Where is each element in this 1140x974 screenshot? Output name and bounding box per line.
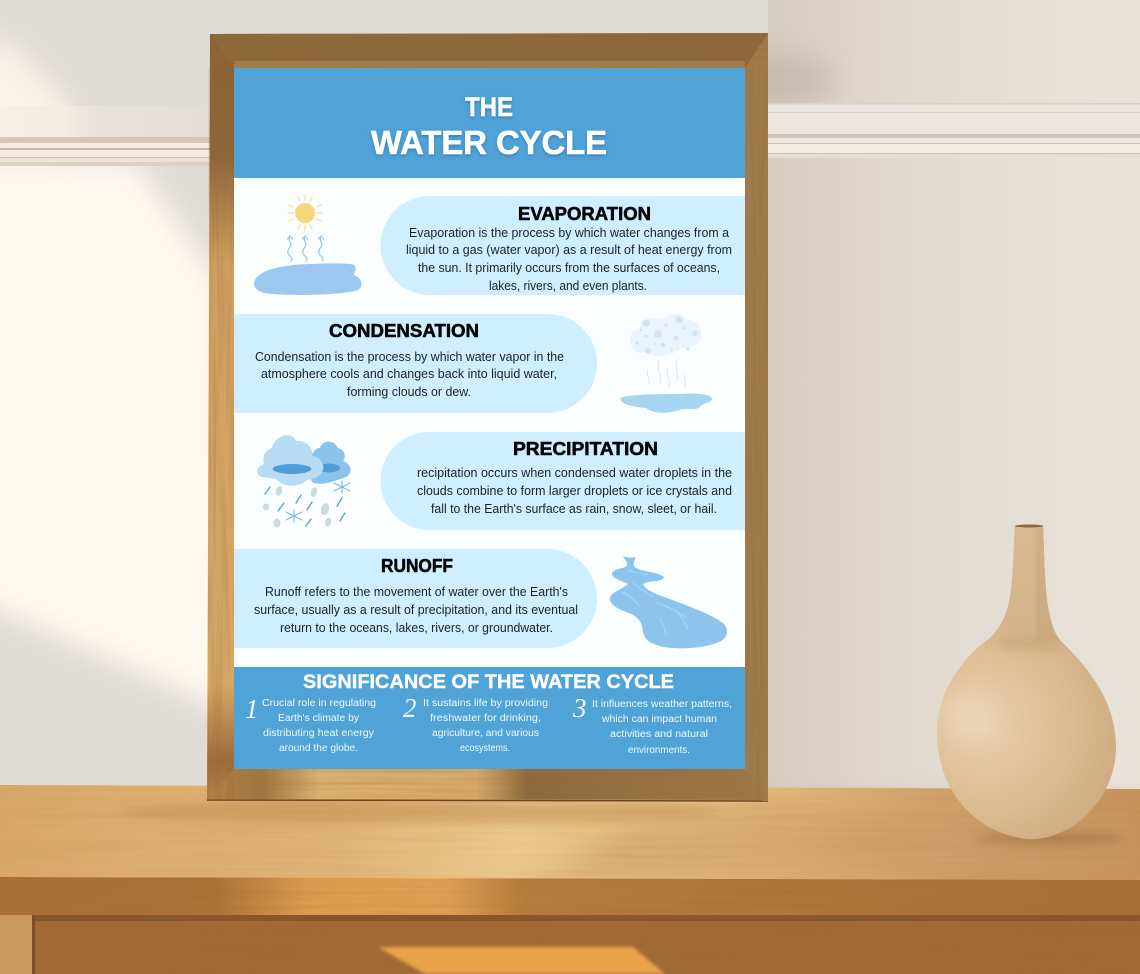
- vase: [937, 524, 1125, 843]
- front cloud: [257, 435, 323, 486]
- table top: [0, 785, 1140, 880]
- snowflakes: [286, 481, 350, 522]
- panel: condensation: atmosphere cools and changes back into liquid water,: [261, 367, 557, 381]
- point 1: [245, 694, 376, 754]
- title: [371, 92, 607, 162]
- point 3: environments.: [628, 745, 690, 756]
- puddle: [254, 263, 361, 295]
- back cloud: [309, 442, 351, 484]
- point 2: [403, 693, 548, 754]
- panel: evaporation: the sun. It primarily occurs from the surfaces of oceans,: [418, 261, 720, 275]
- point 1: Crucial role in regulating: [262, 698, 376, 709]
- wall molding: [0, 103, 1140, 166]
- point 2: 2: [403, 693, 416, 723]
- steam: [647, 360, 686, 388]
- panel: runoff: return to the oceans, lakes, rivers, or groundwater.: [280, 621, 553, 635]
- cloud: [630, 314, 701, 356]
- icon: river: [610, 556, 727, 648]
- wooden table: [0, 785, 1140, 974]
- point 3: [572, 693, 732, 756]
- panel: precipitation: recipitation occurs when condensed water droplets in the: [417, 466, 732, 480]
- picture frame: [207, 33, 768, 801]
- panel: runoff: RUNOFF: [381, 556, 453, 576]
- sunlight patch on the left wall: [0, 36, 209, 712]
- title: WATER CYCLE: [371, 125, 607, 162]
- point 2: It sustains life by providing: [423, 698, 548, 709]
- hail: [263, 485, 332, 528]
- poster background: [234, 68, 745, 769]
- sun: [288, 196, 322, 231]
- point 2: freshwater for drinking,: [430, 713, 541, 724]
- panel: condensation: Condensation is the process by which water vapor in the: [255, 350, 564, 364]
- table leg: [0, 915, 34, 974]
- header band: [234, 68, 745, 178]
- point 3: activities and natural: [610, 729, 708, 740]
- background: wall: [0, 0, 890, 788]
- poster: [234, 68, 745, 769]
- panel: runoff: Runoff refers to the movement of water over the Earth's: [265, 585, 568, 599]
- table front edge: [0, 877, 1140, 918]
- panel: evaporation: Evaporation is the process by which water changes from a: [409, 226, 729, 240]
- significance heading: SIGNIFICANCE OF THE WATER CYCLE: [303, 671, 674, 693]
- point 1: distributing heat energy: [263, 728, 374, 739]
- point 1: Earth's climate by: [278, 713, 359, 724]
- panel: runoff: surface, usually as a result of precipitation, and its eventual: [254, 603, 578, 617]
- icon: condensation cloud and puddle: [621, 314, 712, 413]
- panel: precipitation: fall to the Earth's surface as rain, snow, sleet, or hail.: [431, 502, 717, 516]
- title: THE: [465, 92, 513, 122]
- frame shadow on the right wall: [735, 54, 835, 106]
- point 3: It influences weather patterns,: [592, 699, 732, 710]
- frame right: [745, 33, 768, 800]
- point 3: 3: [572, 693, 586, 723]
- panel: condensation: CONDENSATION: [329, 321, 479, 341]
- vase neck and shading: [944, 524, 1070, 739]
- rain: [265, 487, 345, 526]
- panel: precipitation: [380, 432, 745, 530]
- frame top: [210, 33, 768, 68]
- panel: condensation: [234, 314, 597, 413]
- puddle: [621, 394, 712, 413]
- panel: evaporation: EVAPORATION: [518, 204, 651, 224]
- point 2: ecosystems.: [460, 743, 510, 754]
- point 2: agriculture, and various: [432, 728, 539, 739]
- panel: precipitation: clouds combine to form larger droplets or ice crystals and: [417, 484, 732, 498]
- under-table panel: [0, 915, 1140, 974]
- vase body: [937, 526, 1116, 839]
- panel: precipitation: PRECIPITATION: [513, 439, 658, 459]
- vapor arrows: [288, 236, 324, 261]
- frame bottom: [207, 769, 768, 800]
- panel: evaporation: lakes, rivers, and even plants.: [489, 279, 647, 293]
- icon: sun and evaporating puddle: [254, 196, 361, 295]
- frame left: [207, 34, 234, 799]
- panel: significance of the water cycle: [234, 667, 745, 769]
- panel: runoff: [234, 549, 597, 648]
- panel: evaporation: [380, 196, 745, 295]
- icon: rain cloud: [257, 435, 351, 528]
- panel: condensation: forming clouds or dew.: [347, 385, 471, 399]
- point 3: which can impact human: [601, 714, 717, 725]
- point 1: around the globe.: [279, 743, 358, 754]
- panel: evaporation: liquid to a gas (water vapor) as a result of heat energy from: [406, 243, 732, 257]
- point 1: 1: [245, 694, 258, 724]
